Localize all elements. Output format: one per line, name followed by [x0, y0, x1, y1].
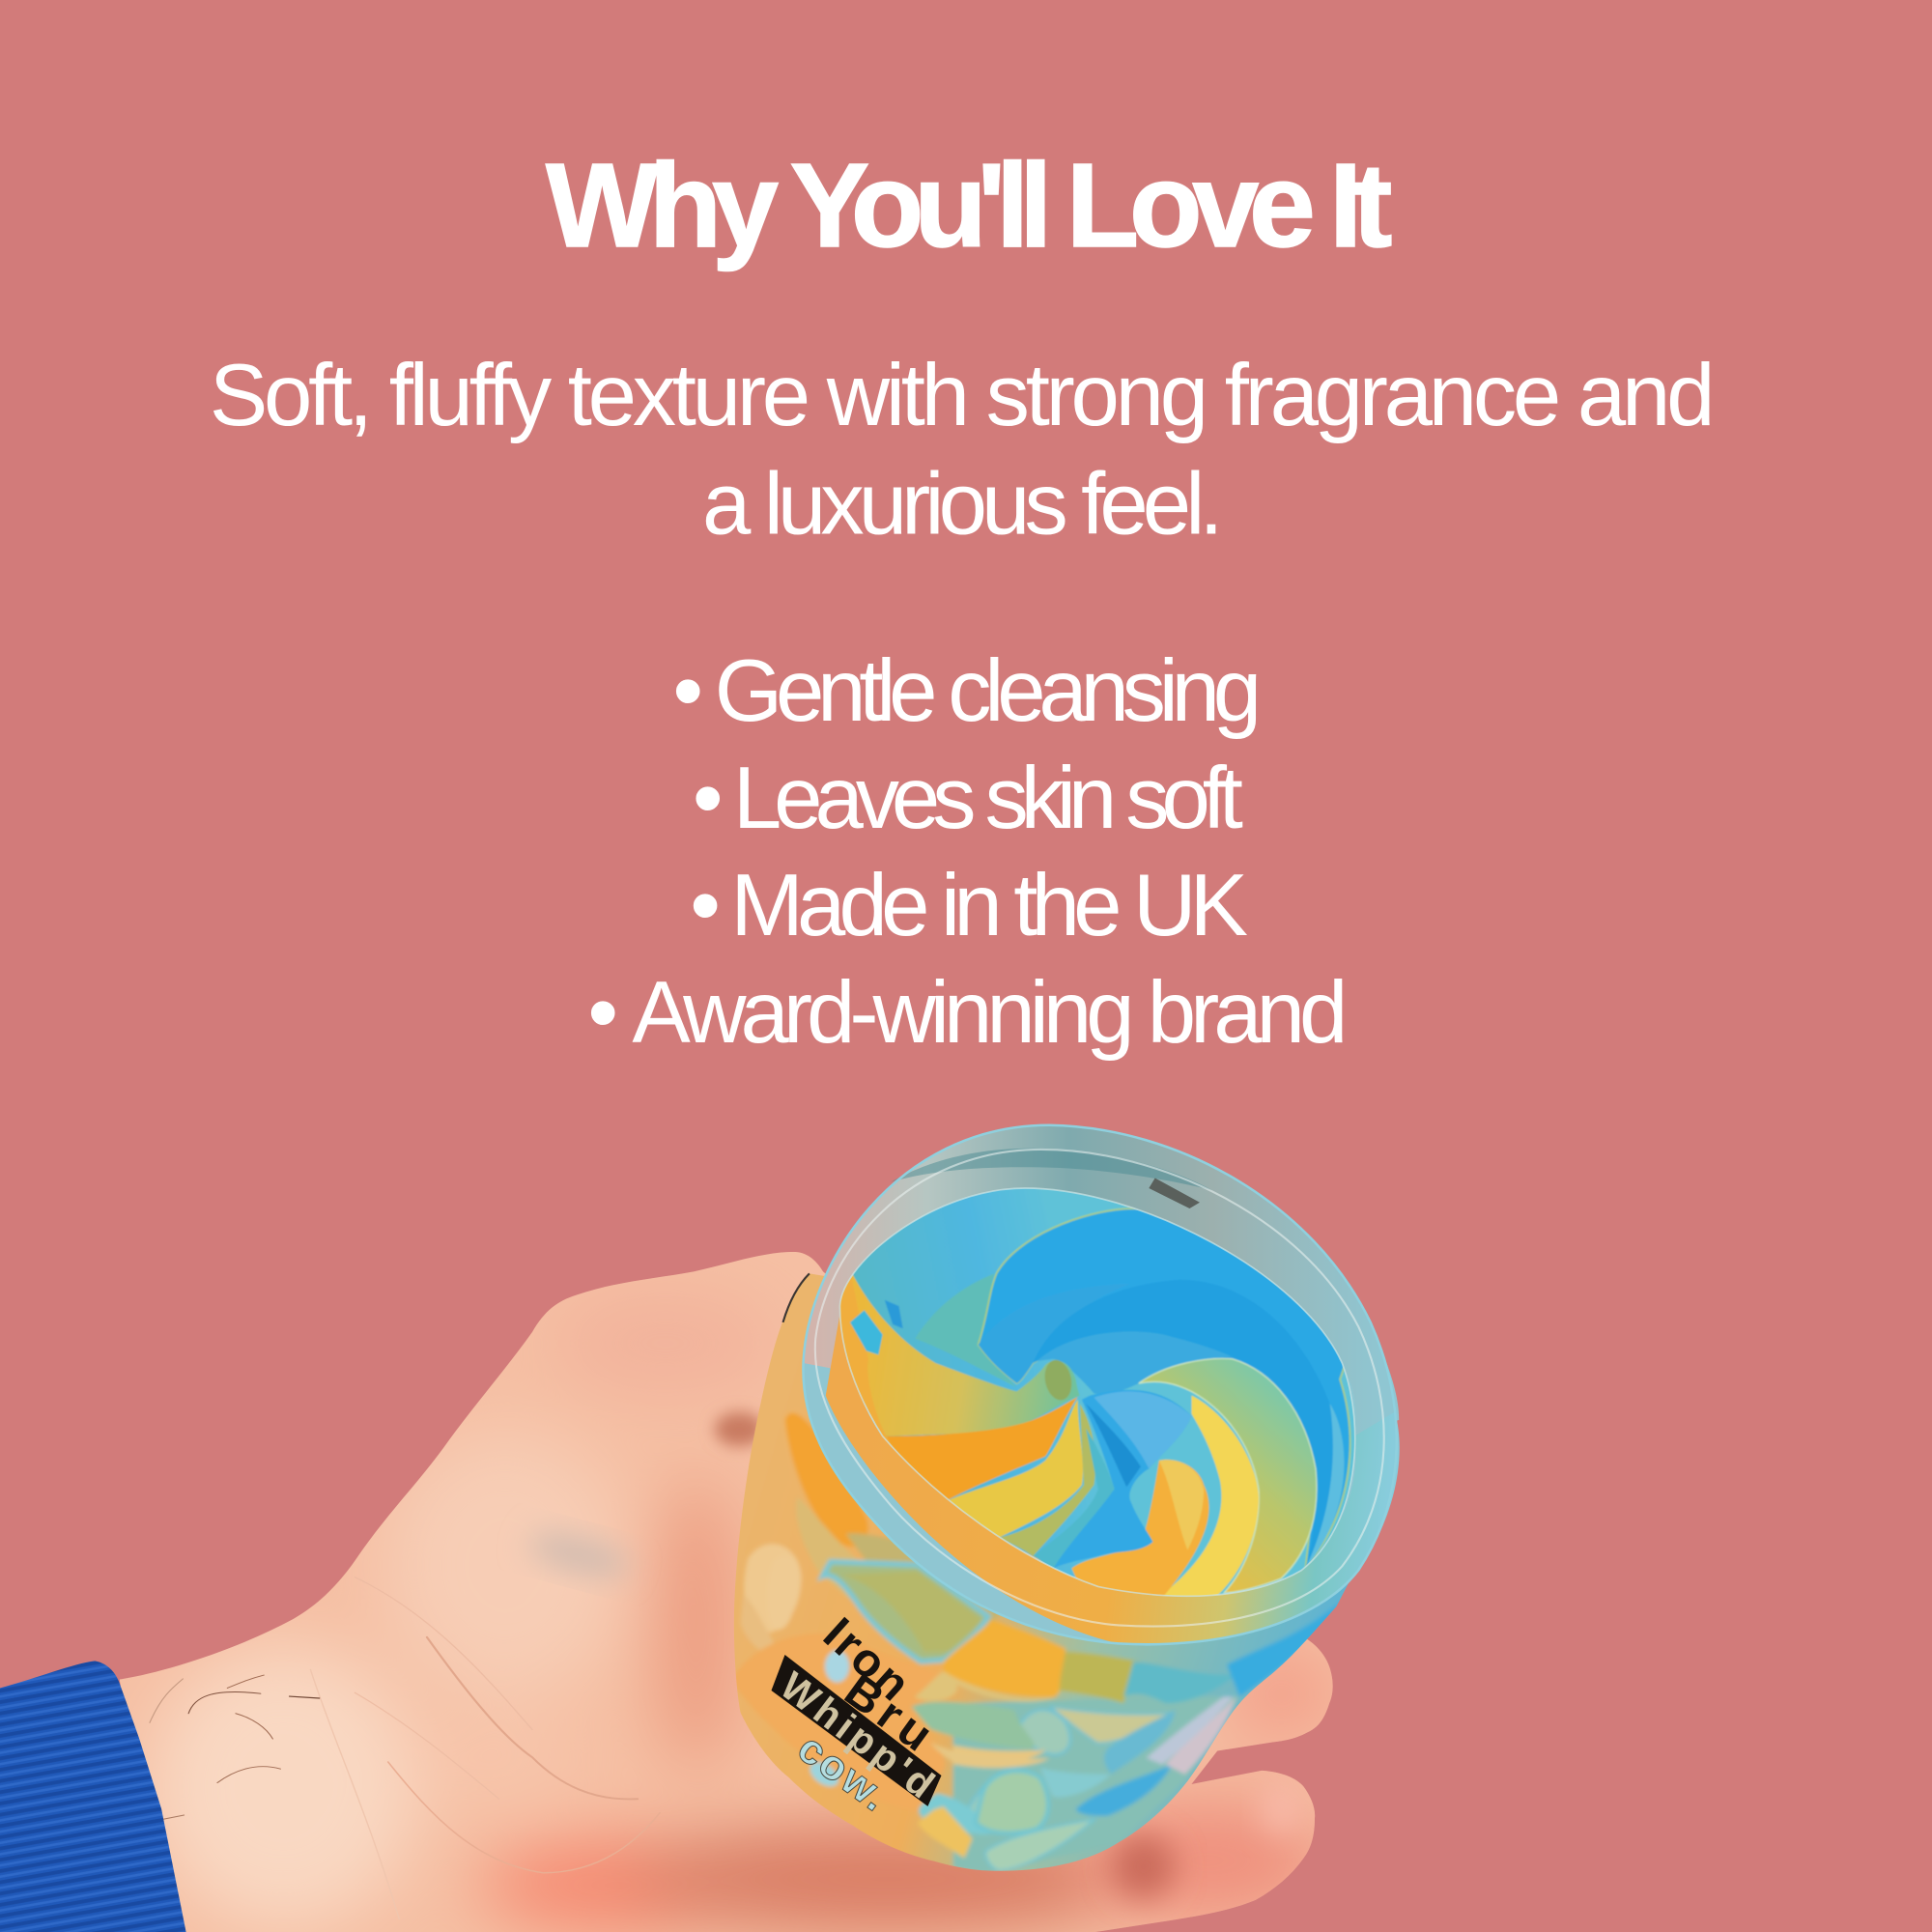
label: Bru: Bru	[836, 1664, 942, 1762]
blue wedge	[1075, 1765, 1172, 1816]
blue bubble behind text	[825, 1650, 849, 1683]
yellow wedge	[946, 1400, 1083, 1538]
bright blue band	[1227, 1601, 1343, 1697]
blob 2	[1050, 1707, 1172, 1744]
benefits list	[587, 642, 1348, 1062]
tan wave	[779, 1617, 791, 1631]
bullet: award-winning brand: •	[587, 964, 618, 1062]
orange region	[731, 1634, 945, 1813]
turquoise strip	[1033, 1428, 1115, 1569]
traced front detail A	[731, 1555, 1065, 1858]
label: Whipp'd: Whipp'd	[772, 1663, 943, 1807]
tan ribbon	[930, 1742, 1050, 1768]
label: Iron: Iron	[813, 1607, 920, 1711]
tan wave 2	[740, 1602, 774, 1650]
big bubble	[976, 1771, 1048, 1833]
blob 3	[968, 1789, 982, 1810]
intro line 1: Soft, fluffy texture with strong fragrance and	[210, 347, 1716, 444]
blob 4	[1040, 1768, 1111, 1798]
tan ribbon	[953, 1746, 1046, 1765]
label: cow.: cow.	[789, 1725, 896, 1820]
center pale petal	[1094, 1391, 1192, 1468]
back tan sliver	[863, 1207, 940, 1262]
blue dots	[885, 1300, 903, 1328]
right base tint	[953, 1697, 1239, 1874]
thenar grey highlight	[525, 1525, 634, 1585]
bottom blob	[985, 1819, 1094, 1871]
olive fold	[999, 1404, 1095, 1556]
pale reflection	[1166, 1697, 1236, 1775]
photo: hand holding jar	[0, 1125, 1411, 1932]
center blue petals	[1033, 1390, 1192, 1569]
bullet: made in the UK: •	[690, 857, 721, 954]
bullet: gentle cleansing: Gentle cleansing	[715, 642, 1262, 740]
blue speck	[850, 1310, 883, 1355]
bullet: leaves skin soft: •	[693, 750, 724, 847]
turquoise smear	[823, 1562, 988, 1662]
blue green valley	[915, 1273, 1017, 1387]
green mid	[911, 1702, 1035, 1748]
orange wedge	[887, 1397, 1078, 1501]
thumb crease shadow	[715, 1412, 764, 1446]
blob 1	[1019, 1710, 1070, 1755]
left tan waves	[745, 1544, 802, 1633]
bullet: gentle cleansing: •	[672, 642, 703, 740]
bullet: leaves skin soft: Leaves skin soft	[733, 750, 1243, 847]
finger base shadow	[1112, 1834, 1176, 1899]
palm creases and wrist hairs	[149, 1577, 639, 1874]
jar body	[734, 1273, 1349, 1871]
bubble under cow	[806, 1757, 843, 1791]
left yellow green band	[850, 1269, 1080, 1436]
swirled cream	[830, 1180, 1367, 1607]
blue wave	[919, 1794, 995, 1834]
bullet: award-winning brand: Award-winning brand	[632, 964, 1348, 1062]
top blue band	[979, 1208, 1350, 1569]
title: Why You'll Love It	[546, 139, 1392, 272]
intro text	[210, 347, 1716, 553]
bullet: made in the UK: Made in the UK	[730, 857, 1248, 954]
right green and yellow band	[1139, 1358, 1317, 1593]
olive band	[1060, 1652, 1140, 1703]
blue right edge	[1305, 1404, 1344, 1569]
tan band	[915, 1671, 1056, 1701]
yellow band	[1054, 1681, 1063, 1695]
yellow triangle	[918, 1806, 973, 1858]
teal band	[1123, 1662, 1236, 1703]
sleeve	[0, 1651, 197, 1932]
label: black box	[771, 1655, 941, 1806]
rim highlights	[783, 1125, 1397, 1644]
inner yellow fold	[1159, 1460, 1204, 1550]
traced front detail B	[953, 1601, 1343, 1874]
main blue ridge	[1033, 1280, 1336, 1569]
upper left orange	[785, 1413, 868, 1547]
hand	[99, 1233, 1355, 1932]
jar label	[771, 1607, 943, 1820]
orange swirl	[944, 1620, 1065, 1697]
lower blue lobe	[1037, 1331, 1233, 1394]
fingertip highlight	[1262, 1784, 1301, 1833]
jar	[720, 1125, 1411, 1875]
second ridge	[979, 1284, 1130, 1383]
center dark valley	[1086, 1404, 1141, 1487]
lip front colours	[826, 1314, 1400, 1644]
orange left edge	[834, 1269, 1078, 1591]
intro line 2: a luxurious feel.	[702, 455, 1224, 553]
bottom orange band	[1071, 1460, 1209, 1597]
inner yellow band	[1159, 1396, 1259, 1597]
lip back glass	[804, 1125, 1399, 1436]
rim underlay	[803, 1125, 1397, 1644]
blue mid	[1104, 1710, 1176, 1775]
crater hollow	[1041, 1357, 1075, 1403]
